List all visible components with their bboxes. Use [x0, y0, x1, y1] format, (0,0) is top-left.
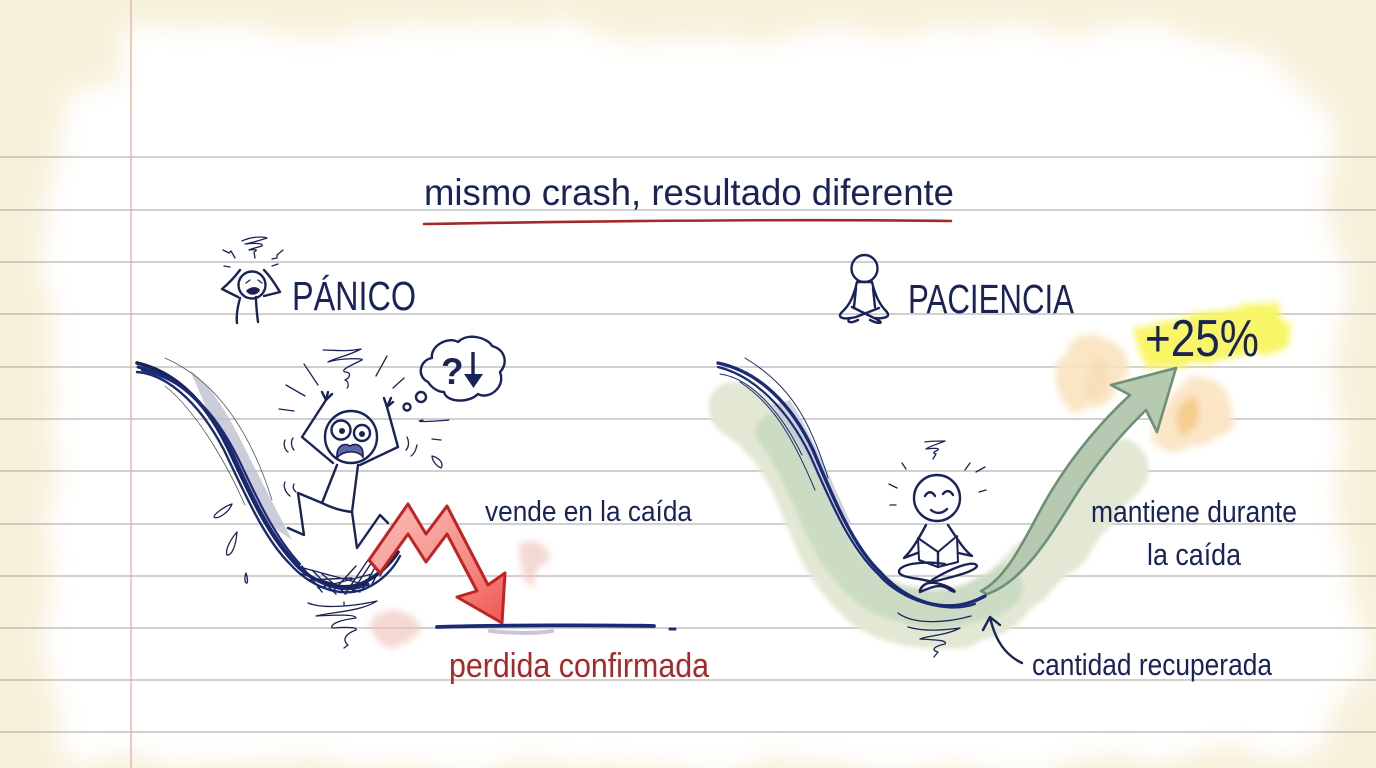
pink watercolor stains: [371, 540, 549, 648]
rumble under figure: [898, 613, 971, 657]
crash curve: [137, 358, 400, 594]
callout: +25%: +25%: [1145, 310, 1259, 368]
notebook margin line: [130, 0, 132, 768]
calm reading figure: [889, 441, 986, 592]
title: mismo crash, resultado diferente: [424, 172, 954, 213]
heading: pánico: PÁNICO: [292, 273, 416, 319]
label: mantiene durante la caída: [1091, 494, 1297, 572]
icon: meditating person: [840, 255, 888, 323]
label: perdida confirmada: perdida confirmada: [449, 647, 709, 685]
yellow highlight: [1132, 300, 1292, 370]
notebook ruled lines: [0, 157, 1376, 732]
green rising arrow: [981, 368, 1176, 594]
heading: paciencia: PACIENCIA: [908, 276, 1074, 322]
label: cantidad recuperada: cantidad recuperada: [1032, 647, 1273, 682]
panel: paciencia: [718, 255, 1297, 682]
panel: pánico: [137, 237, 709, 685]
green recovery wash: [740, 412, 1118, 620]
icon: stressed person: [222, 237, 283, 323]
arrow to recovered amount: [983, 617, 1022, 663]
label: vende en la caída: vende en la caída: [485, 496, 693, 528]
thought bubble: [404, 337, 505, 410]
red falling arrow: [369, 504, 505, 623]
thought bubble: ?: [441, 351, 464, 392]
label: mantiene durante la caída: mantiene durante: [1091, 494, 1297, 529]
sweat drops and rumble: [214, 504, 377, 648]
baseline of loss: [437, 625, 675, 633]
label: mantiene durante la caída: la caída: [1147, 537, 1242, 572]
hold curve: [718, 358, 985, 607]
orange watercolor stains: [1056, 335, 1233, 450]
panicked figure: [279, 349, 449, 548]
